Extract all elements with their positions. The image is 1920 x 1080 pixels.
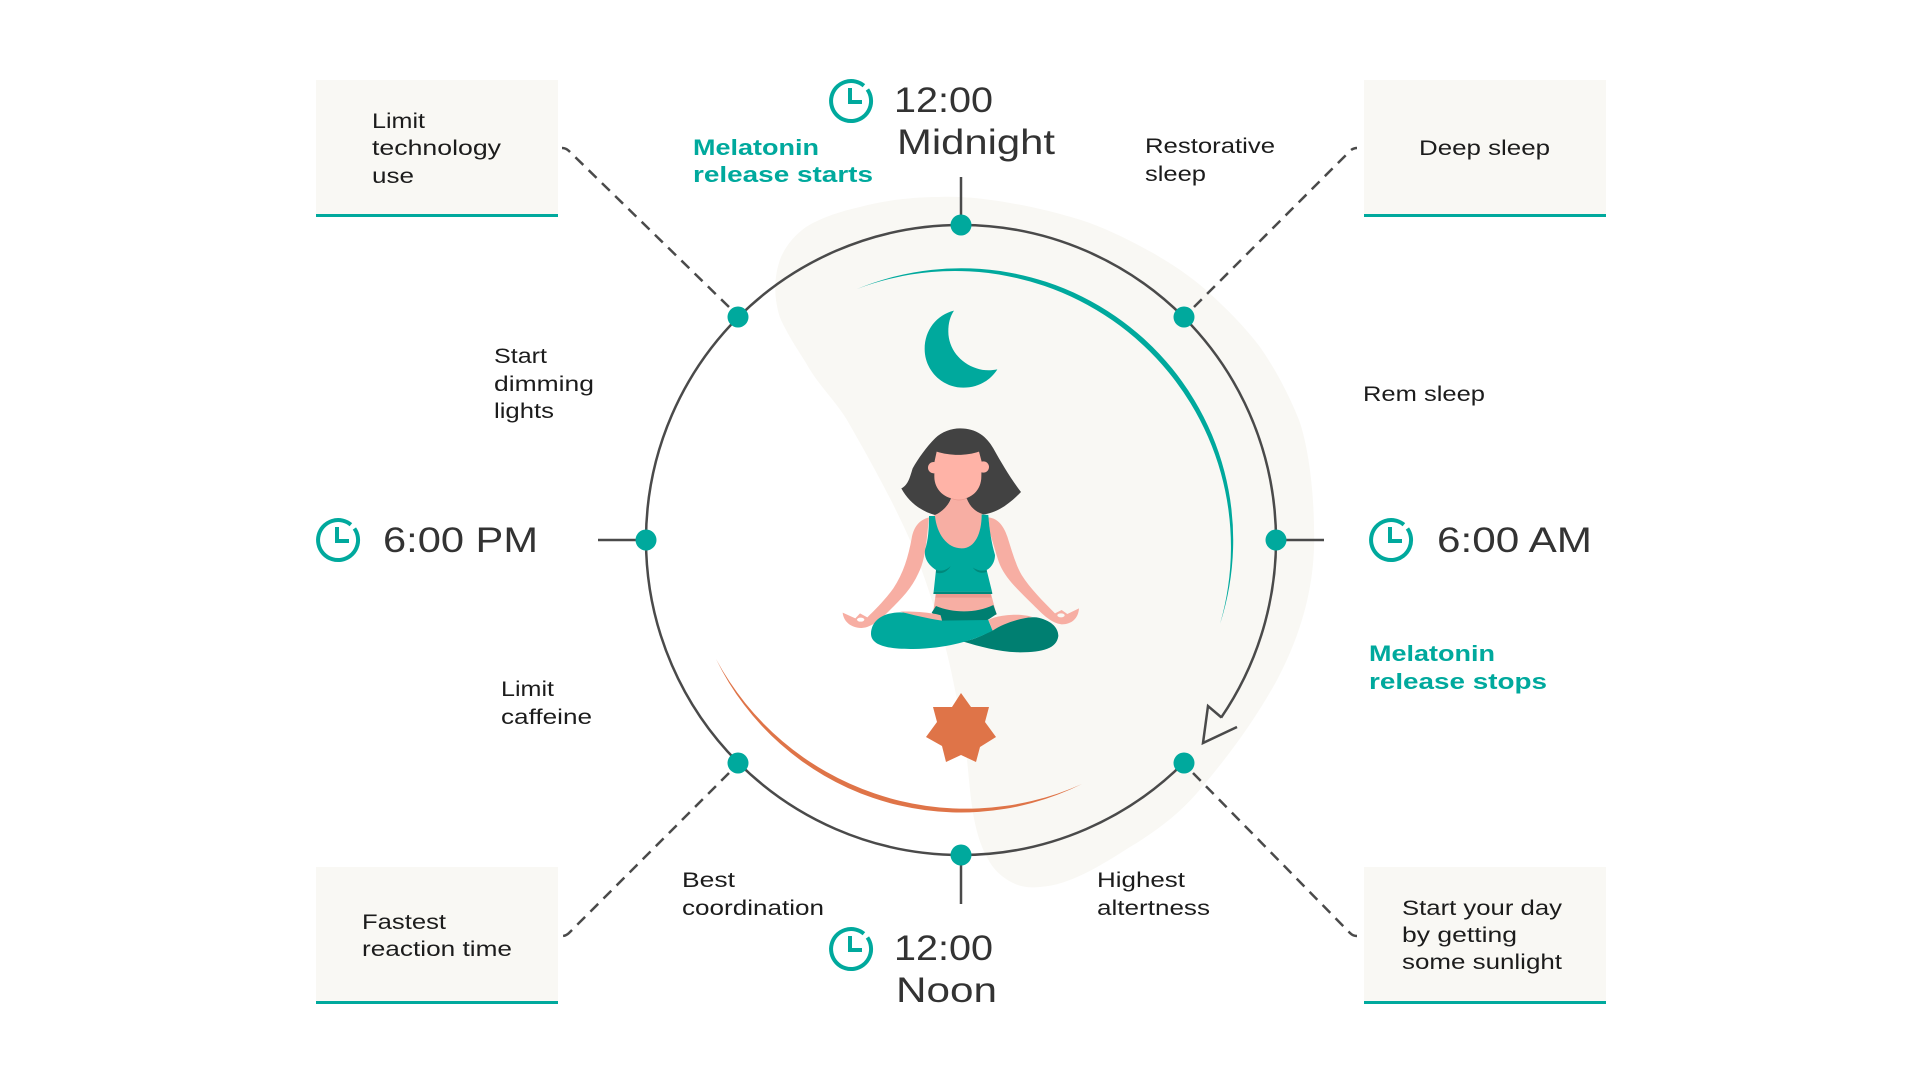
box: limit technology use: use (372, 165, 414, 188)
label: limit caffeine (501, 678, 592, 729)
label: start dimming lights (494, 345, 594, 423)
box: limit technology use (316, 80, 558, 217)
time label: 12:00 midnight: 12:00 (894, 81, 993, 120)
label: start dimming lights: Start (494, 345, 547, 368)
tick lines (598, 177, 1324, 904)
callout: melatonin release starts: release starts (693, 162, 873, 187)
box: start your day: some sunlight (1402, 951, 1562, 974)
label: highest altertness (1097, 869, 1210, 920)
box: start your day (1364, 867, 1606, 1004)
time label: 12:00 noon: Noon (896, 971, 997, 1010)
box: start your day: Start your day (1402, 897, 1563, 920)
label: highest altertness: altertness (1097, 897, 1210, 920)
label: best coordination: Best (682, 869, 735, 892)
box: fastest reaction time: reaction time (362, 938, 512, 961)
time label: 12:00 midnight: Midnight (897, 123, 1055, 162)
teal night arc (857, 268, 1233, 624)
label: start dimming lights: dimming (494, 373, 594, 396)
orange day arc (716, 659, 1082, 812)
illustration: meditating woman (843, 428, 1079, 652)
box: deep sleep (1364, 80, 1606, 217)
icon: sun (926, 693, 996, 762)
label: best coordination (682, 869, 824, 920)
background blob (775, 197, 1314, 887)
label: restorative sleep (1145, 135, 1275, 186)
time label: 6:00 AM: 6:00 AM (1437, 521, 1592, 560)
dashed connectors (562, 148, 1357, 936)
label: limit caffeine: caffeine (501, 706, 592, 729)
box: start your day: by getting (1402, 924, 1517, 947)
label: limit caffeine: Limit (501, 678, 554, 701)
time label: 12:00 midnight (894, 81, 1055, 162)
callout: melatonin release stops: Melatonin (1369, 641, 1495, 666)
box: limit technology use: technology (372, 137, 502, 160)
clock: 6am (1371, 520, 1411, 560)
clock: 6pm (318, 520, 358, 560)
box: limit technology use: Limit (372, 110, 425, 133)
label: rem sleep: Rem sleep (1363, 383, 1485, 406)
time label: 6:00 PM: 6:00 PM (383, 521, 538, 560)
icon: moon (925, 311, 997, 388)
main cycle ring with arrow (516, 95, 1406, 985)
callout: melatonin release starts: Melatonin (693, 135, 819, 160)
label: restorative sleep: sleep (1145, 163, 1206, 186)
ring markers (636, 214, 1286, 866)
box: deep sleep: Deep sleep (1419, 137, 1550, 160)
box: fastest reaction time (316, 867, 558, 1004)
clock: noon (831, 929, 871, 969)
label: best coordination: coordination (682, 897, 824, 920)
label: highest altertness: Highest (1097, 869, 1185, 892)
box: fastest reaction time: Fastest (362, 911, 446, 934)
time label: 12:00 noon (894, 929, 997, 1010)
callout: melatonin release stops: release stops (1369, 669, 1547, 694)
callout: melatonin release stops (1369, 641, 1547, 694)
time label: 12:00 noon: 12:00 (894, 929, 993, 968)
clock: midnight (831, 81, 871, 121)
callout: melatonin release starts (693, 135, 873, 187)
label: restorative sleep: Restorative (1145, 135, 1275, 158)
label: start dimming lights: lights (494, 400, 554, 423)
